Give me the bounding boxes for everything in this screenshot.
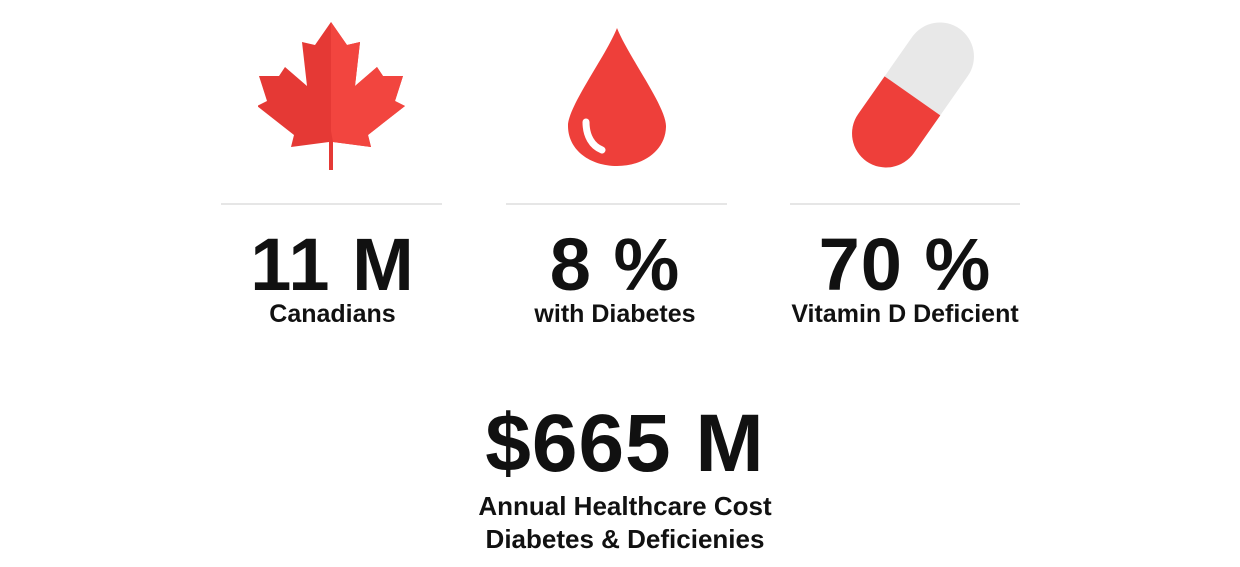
label: cost description: Annual Healthcare Cost	[478, 491, 772, 521]
stat: healthcare cost	[478, 398, 772, 554]
icon: maple leaf	[258, 22, 405, 170]
label: cost description: Diabetes & Deficienies	[486, 524, 764, 554]
icon: pill	[852, 22, 974, 168]
label: with Diabetes: with Diabetes	[534, 300, 696, 328]
label: cost description	[478, 491, 772, 554]
icon: blood drop	[568, 28, 666, 166]
number: 8 %: 8 %	[550, 223, 680, 306]
number: 70 %: 70 %	[819, 223, 991, 306]
stat: diabetes	[534, 223, 696, 328]
number: 11 M: 11 M	[250, 223, 415, 306]
stat: vitamin D	[791, 223, 1019, 328]
number: $665 M: $665 M	[485, 398, 765, 489]
label: Canadians: Canadians	[269, 300, 396, 328]
stat: canadians	[250, 223, 415, 328]
label: Vitamin D Deficient: Vitamin D Deficient	[791, 300, 1019, 328]
